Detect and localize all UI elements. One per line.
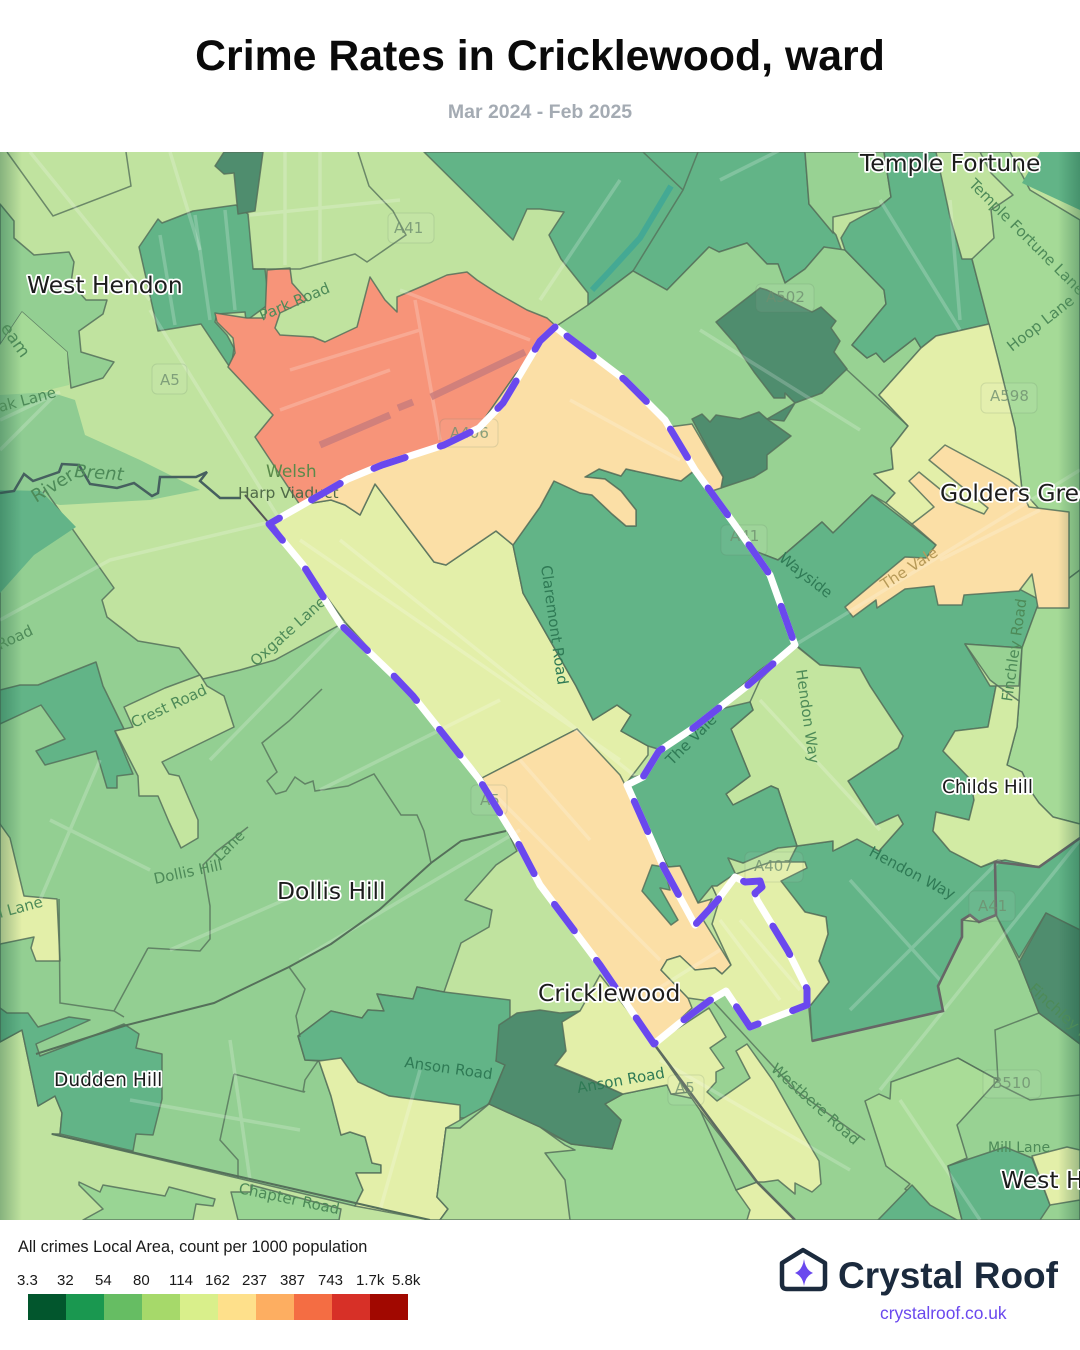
legend title: All crimes Local Area, count per 1000 population bbox=[18, 1238, 367, 1256]
road number shields: A407 bbox=[754, 857, 793, 875]
crime-rate area polygons bbox=[0, 152, 1080, 1220]
legend tick values: 743 bbox=[318, 1272, 343, 1289]
vignette bbox=[0, 152, 1080, 1220]
road labels: The Vale bbox=[877, 543, 941, 594]
road labels: Harp Viaduct bbox=[238, 484, 339, 502]
legend tick values: 32 bbox=[57, 1272, 74, 1289]
legend tick values: 1.7k bbox=[356, 1272, 384, 1289]
road labels: Chapter Road bbox=[237, 1179, 341, 1218]
area boundary lines bbox=[7, 152, 1080, 1178]
road number shields: A41 bbox=[730, 527, 759, 545]
ward boundary: purple dashes bbox=[269, 327, 807, 1044]
road labels: Wayside bbox=[776, 549, 836, 602]
road number shields: A406 bbox=[450, 424, 489, 442]
title: Crime Rates in Cricklewood, ward bbox=[195, 32, 885, 80]
canal bbox=[592, 186, 671, 290]
road number shields bbox=[152, 213, 1041, 1105]
road number shields: A5 bbox=[480, 791, 500, 809]
legend tick values: 54 bbox=[95, 1272, 112, 1289]
place labels: West Hendon bbox=[27, 271, 183, 299]
road labels: Mill Lane bbox=[988, 1140, 1050, 1156]
logo wordmark: Crystal Roof bbox=[838, 1255, 1058, 1296]
road number shields: A502 bbox=[766, 288, 805, 306]
icon: house with star bbox=[780, 1248, 828, 1292]
place labels: Dollis Hill bbox=[277, 877, 386, 905]
road labels: Welsh bbox=[266, 462, 317, 482]
road labels: Lane bbox=[210, 826, 248, 865]
road labels: Westbere Road bbox=[767, 1060, 863, 1149]
logo: Crystal Roof bbox=[780, 1248, 1058, 1296]
road number shields: A5 bbox=[675, 1079, 695, 1097]
road labels: Claremont Road bbox=[537, 564, 572, 686]
railway and main road lines bbox=[654, 1044, 795, 1220]
road number shields: A598 bbox=[990, 387, 1029, 405]
legend tick values: 80 bbox=[133, 1272, 150, 1289]
legend colour scale bbox=[28, 1294, 408, 1320]
road labels: Crest Road bbox=[128, 681, 210, 732]
road number shields: B510 bbox=[992, 1074, 1031, 1092]
road labels: Anson Road bbox=[576, 1064, 666, 1097]
road labels bbox=[0, 174, 1080, 1218]
legend tick values: 114 bbox=[169, 1272, 193, 1289]
road labels: Hoop Lane bbox=[1003, 292, 1078, 355]
road number shields: A5 bbox=[160, 371, 180, 389]
place labels: Cricklewood bbox=[538, 979, 680, 1007]
road labels: Brent bbox=[74, 461, 125, 485]
legend tick values: 237 bbox=[242, 1272, 267, 1289]
road labels: River bbox=[28, 464, 79, 507]
A406 dual carriageway band bbox=[320, 352, 525, 445]
road labels: Anson Road bbox=[403, 1053, 494, 1083]
road labels: The Vale bbox=[661, 711, 720, 770]
subtitle: date range: Mar 2024 - Feb 2025 bbox=[448, 101, 632, 123]
road labels: Hendon Way bbox=[792, 668, 823, 765]
ward boundary: white outline bbox=[269, 327, 807, 1044]
river Brent bbox=[0, 464, 241, 498]
place labels bbox=[27, 149, 1080, 1194]
road labels: Park Road bbox=[257, 279, 332, 325]
legend tick values: 3.3 bbox=[17, 1272, 38, 1289]
place labels: Dudden Hill bbox=[54, 1070, 162, 1091]
choropleth map bbox=[0, 152, 1080, 1220]
legend tick values: 387 bbox=[280, 1272, 305, 1289]
road number shields: A41 bbox=[394, 219, 423, 237]
road labels: Finchley Road bbox=[998, 597, 1030, 703]
legend tick values bbox=[17, 1272, 420, 1289]
legend tick values: 5.8k bbox=[392, 1272, 420, 1289]
legend tick values: 162 bbox=[205, 1272, 230, 1289]
place labels: Childs Hill bbox=[942, 777, 1033, 798]
road number shields: A41 bbox=[978, 897, 1007, 915]
website link text: crystalroof.co.uk bbox=[880, 1303, 1007, 1323]
road labels: Hendon Way bbox=[866, 843, 958, 903]
road labels: Oxgate Lane bbox=[247, 593, 330, 670]
road labels: Dollis Hill bbox=[152, 856, 224, 888]
